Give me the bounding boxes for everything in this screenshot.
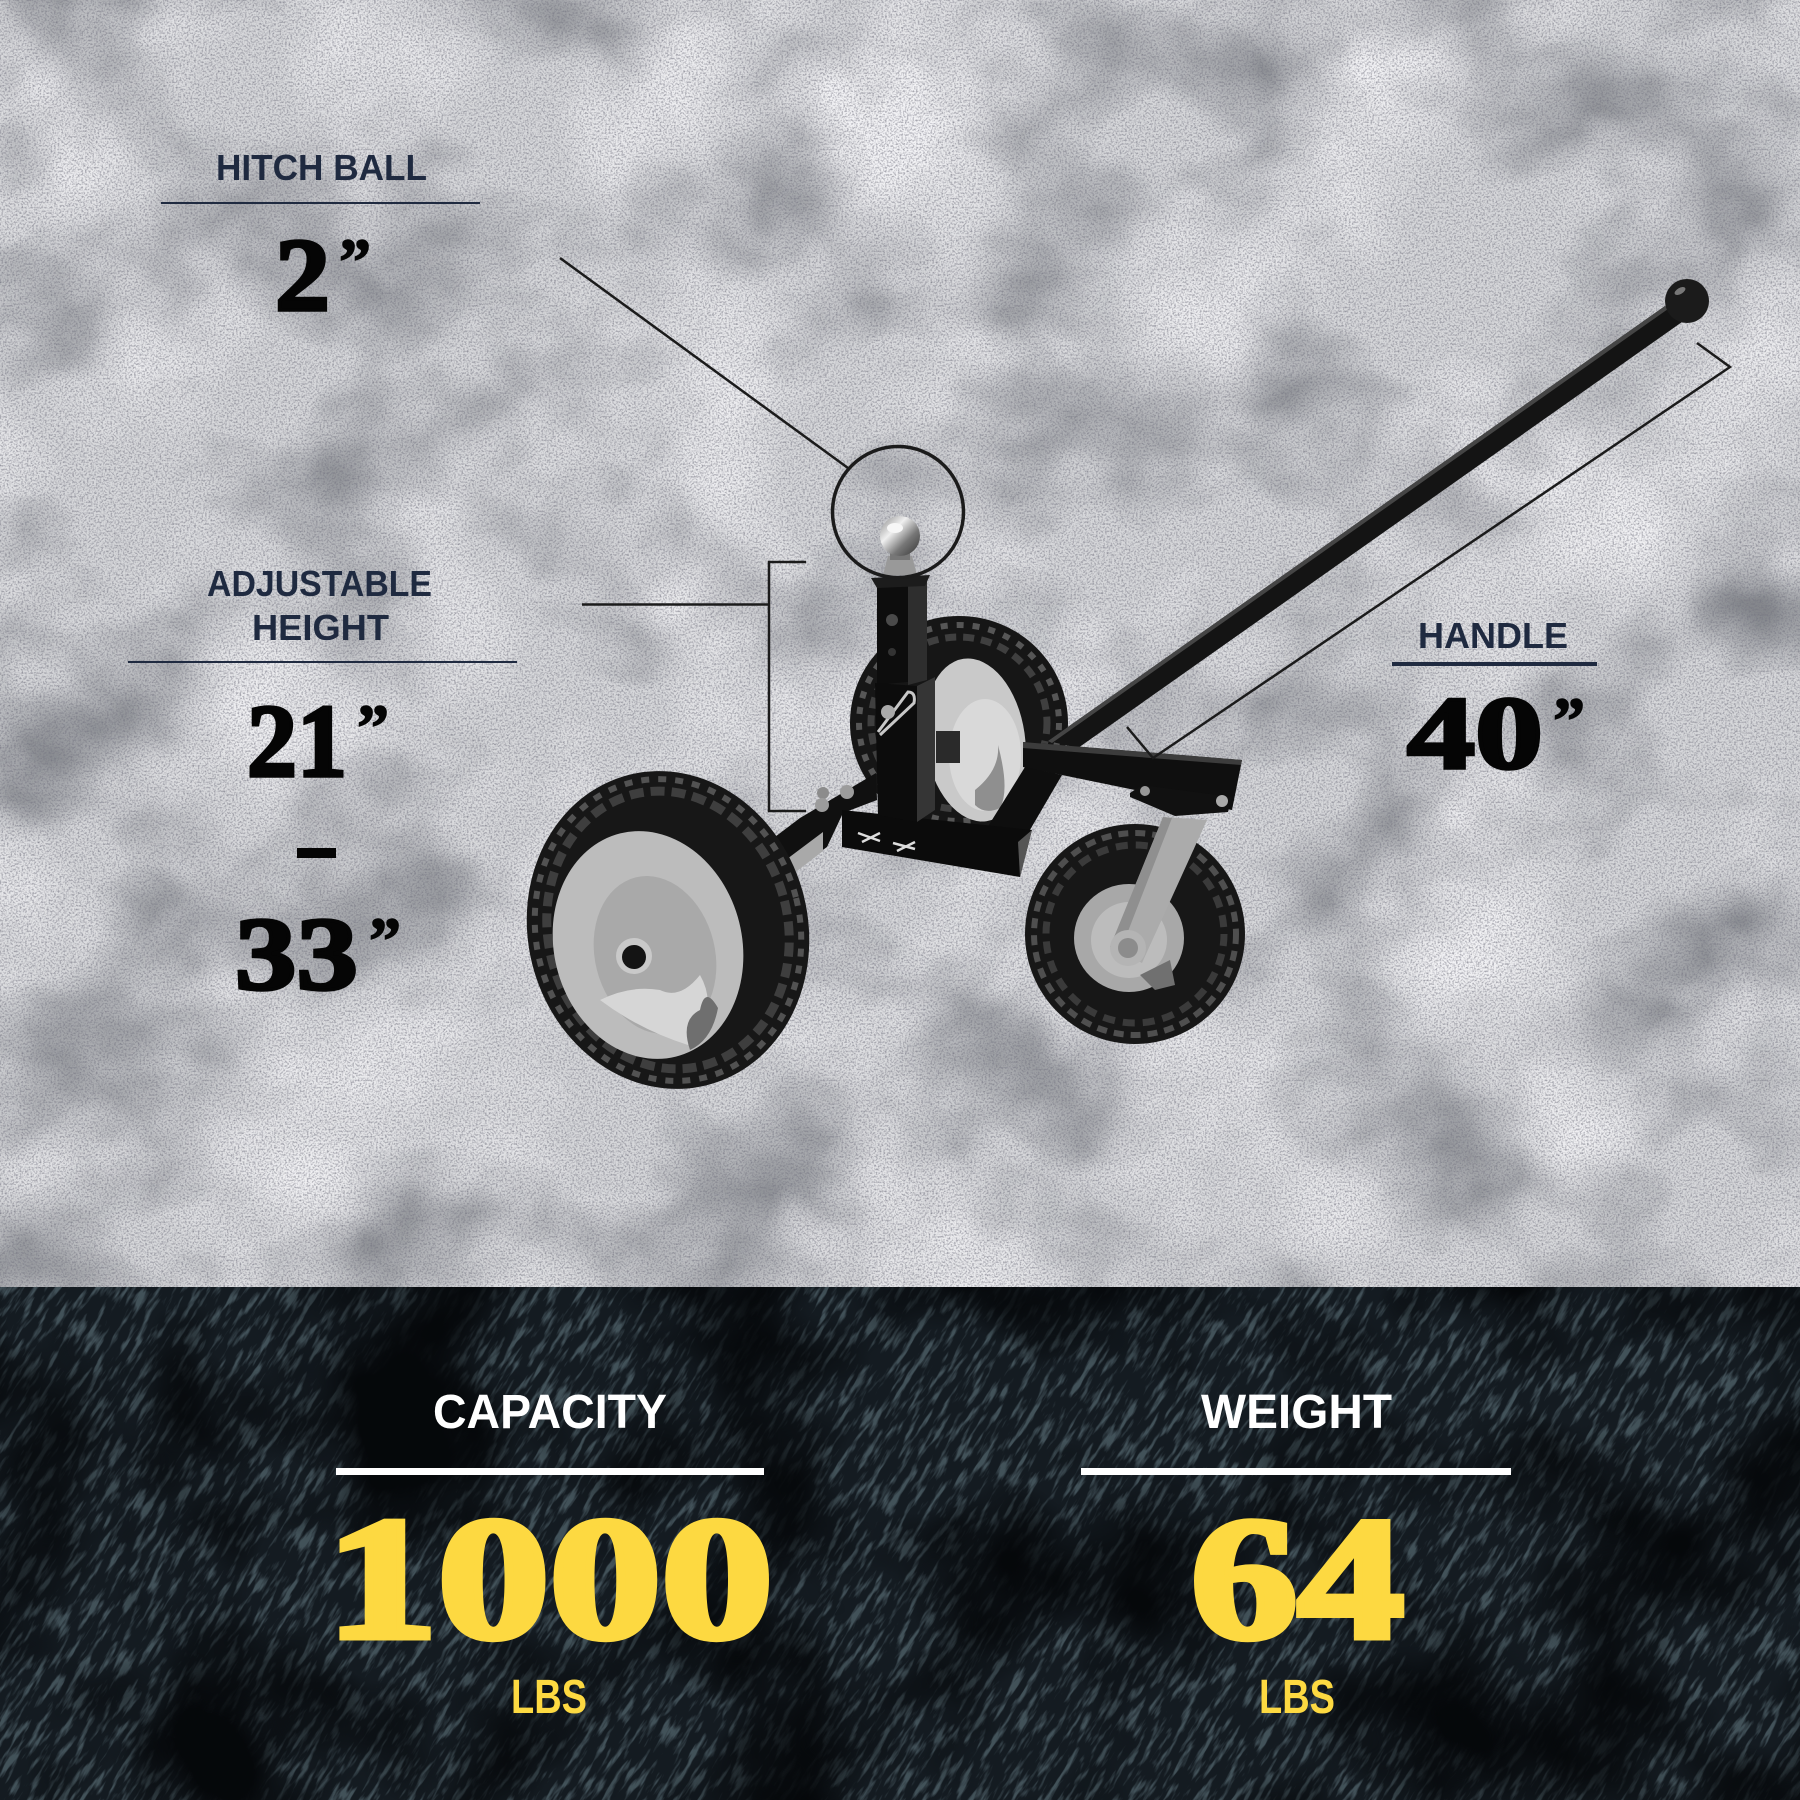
label: adjustable height: ADJUSTABLE [207,563,432,604]
label: handle: 40 [1407,676,1543,791]
label: hitch ball: ” [339,226,371,299]
stat: capacity: CAPACITY [433,1386,667,1439]
label: hitch ball: HITCH BALL [216,147,427,188]
left wheel [493,741,843,1119]
label: adjustable height: HEIGHT [252,607,389,648]
label: handle: HANDLE [1418,615,1568,656]
stat: weight: LBS [1259,1671,1335,1724]
annotation lines [560,258,1730,811]
hitch post [871,575,935,822]
label: adjustable height: 33 [235,897,358,1012]
panel: dark leather footer [0,1287,1800,1800]
label: adjustable height: 21 [247,684,347,799]
stat: weight: WEIGHT [1201,1386,1392,1439]
label: handle [1392,615,1597,791]
label: adjustable height: ” [369,905,401,978]
rear wheel [850,616,1068,830]
label: adjustable height: ” [357,692,389,765]
label: handle: ” [1553,685,1585,758]
stat: capacity: LBS [511,1671,587,1724]
panel: concrete background [0,0,1800,1287]
handle bar [1048,279,1709,748]
chrome hitch ball [880,516,920,575]
stat: capacity: 1000 [326,1482,773,1675]
stat: weight [1081,1386,1511,1724]
label: adjustable height [128,563,517,1012]
caster wheel [1025,785,1245,1044]
left axle arm [767,773,877,874]
strut and base frame [842,767,1062,877]
label: hitch ball [161,147,480,333]
label: hitch ball: 2 [275,218,330,333]
stat: weight: 64 [1191,1482,1404,1675]
right T arm [1023,742,1242,810]
illustration: trailer dolly [493,279,1709,1119]
stat: capacity [326,1386,773,1724]
